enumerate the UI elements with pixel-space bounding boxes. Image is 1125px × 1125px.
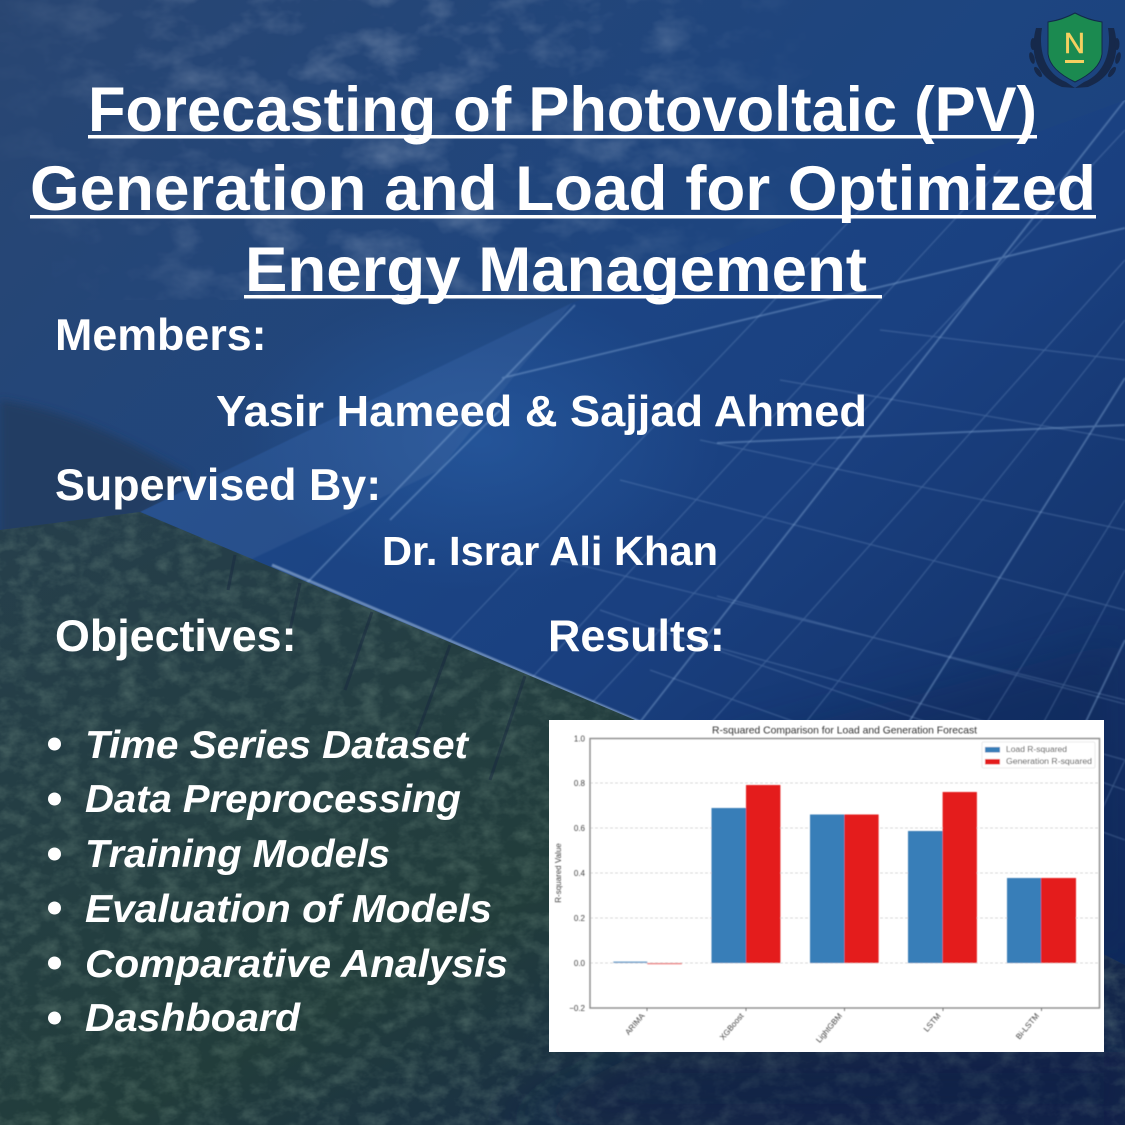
- dark lower vignette: [500, 1052, 1125, 1125]
- logo: laurel crest with green shield: [1028, 13, 1122, 88]
- item: dashboard: Dashboard: [85, 997, 301, 1040]
- bars: load R-squared: [613, 808, 1041, 963]
- y axis title: R-squared Value: [554, 843, 563, 903]
- title line 3: Energy Management: [245, 235, 867, 305]
- panel support posts: [228, 555, 525, 780]
- plot frame: [590, 738, 1100, 1008]
- heading: objectives: Objectives:: [55, 611, 297, 661]
- chart title: R-squared Comparison for Load and Generation Forecast: [712, 724, 977, 736]
- item: time series dataset: Time Series Dataset: [85, 724, 470, 767]
- heading: supervised by: Supervised By:: [55, 460, 381, 510]
- y axis tick labels: −0.2: [569, 1004, 586, 1013]
- y axis tick labels: 0.2: [574, 914, 586, 923]
- legend: Load R-squared: [1006, 745, 1067, 754]
- x axis labels: XGBoost: [718, 1011, 746, 1042]
- distant treeline: [0, 400, 190, 540]
- heading: members: Members:: [55, 310, 267, 360]
- y axis tick labels: 0.8: [574, 779, 586, 788]
- objectives list: [48, 724, 508, 1040]
- clouds: [32, 0, 746, 300]
- title line 2: Generation and Load for Optimized: [30, 154, 1096, 224]
- bar chart: R-squared comparison: [549, 720, 1104, 1052]
- laurel wreath: [1028, 28, 1122, 88]
- bars: generation R-squared: [647, 785, 1076, 964]
- x axis ticks: [647, 1008, 1042, 1011]
- solar panel array: [140, 100, 1125, 965]
- member names: Yasir Hameed & Sajjad Ahmed: [216, 387, 867, 436]
- panel side frame strip: [140, 303, 572, 560]
- title line 1: Forecasting of Photovoltaic (PV): [88, 75, 1037, 145]
- letter N: N: [1064, 28, 1085, 60]
- item: evaluation of models: Evaluation of Models: [85, 888, 492, 931]
- item: data preprocessing: Data Preprocessing: [85, 778, 461, 821]
- x axis labels: LSTM: [922, 1011, 943, 1034]
- grass field: [0, 512, 1125, 1125]
- shield: [1048, 13, 1102, 82]
- y axis tick labels: 1.0: [574, 734, 586, 744]
- y axis tick labels: 0.6: [574, 824, 586, 833]
- y axis tick labels: 0.0: [574, 959, 586, 968]
- supervisor name: Dr. Israr Ali Khan: [382, 528, 718, 574]
- item: comparative analysis: Comparative Analysis: [85, 943, 508, 986]
- gridlines: [590, 783, 1099, 963]
- x axis labels: Bi-LSTM: [1014, 1011, 1041, 1041]
- title: [30, 75, 1096, 305]
- y axis tick labels: [569, 734, 586, 1013]
- item: training models: Training Models: [85, 833, 390, 876]
- panel front edge: [272, 565, 640, 722]
- x axis labels: ARIMA: [623, 1011, 647, 1037]
- logo underline bar: [1065, 60, 1084, 63]
- legend: [982, 742, 1095, 768]
- x axis labels: LightGBM: [814, 1011, 844, 1045]
- legend: Generation R-squared: [1006, 757, 1092, 766]
- x axis labels: [623, 1011, 1041, 1045]
- y axis tick labels: 0.4: [574, 869, 586, 878]
- heading: results: Results:: [548, 611, 725, 661]
